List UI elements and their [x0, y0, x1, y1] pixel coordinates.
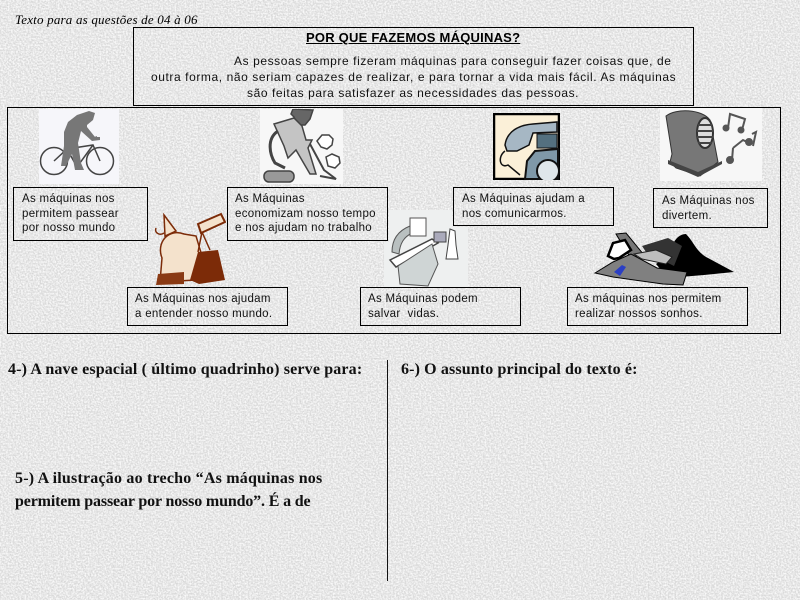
caption text: a entender nosso mundo. [135, 308, 272, 320]
caption text: realizar nossos sonhos. [575, 308, 703, 320]
caption text [368, 293, 478, 320]
caption text: por nosso mundo [22, 222, 115, 234]
intro text line 2: outra forma, não seriam capazes de realizar, e para tornar a vida mais fácil. As máquinas [151, 70, 676, 84]
question 6: 6-) O assunto principal do texto é: [401, 361, 638, 378]
caption text [22, 193, 119, 234]
question 5 [15, 470, 322, 510]
caption: communicate [453, 187, 614, 226]
caption text: economizam nosso tempo [235, 208, 376, 220]
question 5: permitem passear por nosso mundo”. É a de [15, 493, 311, 510]
caption text: salvar vidas. [368, 308, 439, 320]
icon: space shuttle [594, 232, 734, 286]
caption: entertain [653, 188, 768, 228]
icon: telephone [493, 113, 560, 180]
caption text [462, 193, 585, 220]
caption: save time [227, 187, 388, 241]
caption text: As máquinas nos [22, 193, 115, 205]
caption: save lives [360, 287, 521, 326]
intro text line 1: As pessoas sempre fizeram máquinas para conseguir fazer coisas que, de [234, 54, 671, 68]
caption text: e nos ajudam no trabalho [235, 222, 372, 234]
caption text [575, 293, 722, 320]
icon: cyclist [39, 109, 119, 184]
panel: machines [7, 107, 781, 334]
caption text: As máquinas nos permitem [575, 293, 722, 305]
icon: radio and music notes [660, 108, 762, 181]
icon: medical scanner [384, 210, 468, 287]
caption text: permitem passear [22, 208, 119, 220]
question 4: 4-) A nave espacial ( último quadrinho) serve para: [8, 361, 362, 378]
caption: explore the world [13, 187, 148, 241]
heading: text reference: Texto para as questões de 04 à 06 [15, 12, 198, 27]
caption text: As Máquinas ajudam a [462, 193, 585, 205]
panel: introduction [133, 27, 694, 106]
icon: person vacuuming [260, 109, 343, 184]
column divider [387, 360, 388, 581]
caption: understand the world [127, 287, 288, 326]
title: POR QUE FAZEMOS MÁQUINAS? [306, 30, 520, 45]
caption text: As Máquinas nos ajudam [135, 293, 271, 305]
icon: wizard with telescope [154, 212, 226, 285]
caption text: divertem. [662, 210, 712, 222]
caption text [235, 193, 376, 234]
question 5: 5-) A ilustração ao trecho “As máquinas nos [15, 470, 322, 487]
intro text line 3: são feitas para satisfazer as necessidades das pessoas. [247, 86, 579, 100]
caption text: nos comunicarmos. [462, 208, 567, 220]
caption text: As Máquinas [235, 193, 305, 205]
caption text [662, 195, 755, 222]
caption text: As Máquinas nos [662, 195, 755, 207]
caption: realise dreams [567, 287, 748, 326]
caption text: As Máquinas podem [368, 293, 478, 305]
caption text [135, 293, 272, 320]
